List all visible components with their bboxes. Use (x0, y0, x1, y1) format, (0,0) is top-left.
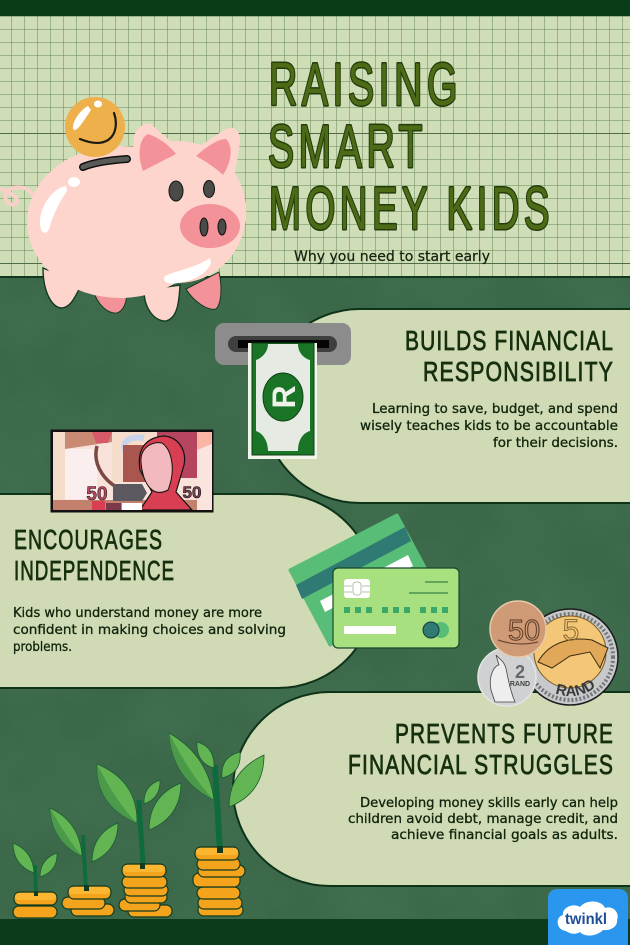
text: prevents future body: Developing money skills early can help (360, 796, 618, 811)
bottom band (0, 919, 630, 945)
icon: rand coins (477, 600, 619, 707)
title (268, 51, 554, 242)
heading: prevents future financial struggles (348, 718, 614, 780)
subtitle: Why you need to start early (294, 249, 490, 265)
eyes (169, 181, 183, 201)
snout (180, 204, 240, 248)
cloud (558, 901, 618, 936)
heading: builds financial responsibility (405, 325, 614, 387)
coin (65, 97, 125, 157)
highlights (40, 186, 67, 233)
icon: growing plants on coin stacks (13, 733, 264, 918)
text: builds financial responsibility body: for their decisions. (493, 436, 618, 451)
ears (134, 126, 182, 172)
graph paper header panel (0, 16, 630, 278)
text: builds financial responsibility body: wisely teaches kids to be accountable (360, 419, 618, 434)
panel: builds financial responsibility (263, 309, 630, 503)
title: SMART (268, 113, 427, 180)
heading: encourages independence: INDEPENDENCE (14, 555, 175, 586)
pig body (27, 146, 213, 298)
banknote (248, 343, 317, 459)
fifty cent coin: 50 (508, 615, 540, 647)
text: encourages independence body (13, 606, 286, 655)
logo: twinkl badge: twinkl (565, 911, 607, 928)
icon: cash slot with banknote: R (266, 385, 302, 409)
icon: piggy bank (0, 97, 246, 321)
icon: fifty rand banknote (52, 431, 212, 511)
heading: encourages independence (14, 524, 175, 586)
text: prevents future body: achieve financial goals as adults. (391, 828, 618, 843)
two rand coin: RAND (510, 681, 530, 688)
title: RAISING (269, 51, 462, 118)
slot housing (215, 323, 351, 365)
five rand coin (528, 608, 619, 706)
icon: credit cards (290, 515, 459, 648)
panel: encourages independence (0, 494, 375, 688)
front feet (43, 268, 82, 308)
text: builds financial responsibility body (360, 402, 618, 451)
top band (0, 0, 630, 16)
text: prevents future body (348, 796, 618, 843)
plant 3 (97, 764, 181, 917)
dark green background (0, 277, 630, 919)
plant 1 (13, 843, 57, 918)
pig tail (0, 187, 33, 205)
icon: fifty rand banknote: 50 (183, 483, 201, 502)
text: encourages independence body: problems. (13, 640, 72, 655)
banknote denomination: 50 (86, 484, 108, 505)
text: builds financial responsibility body: Learning to save, budget, and spend (372, 402, 618, 417)
two rand coin (478, 648, 536, 706)
two rand coin: 2 (515, 662, 525, 682)
text: encourages independence body: confident in making choices and solving (13, 623, 286, 638)
icon: cash slot with banknote (215, 323, 351, 459)
logo: twinkl badge (548, 889, 628, 945)
text: prevents future body: children avoid debt, manage credit, and (348, 812, 618, 827)
plant 4 (169, 733, 264, 916)
panel: prevents future financial struggles (233, 692, 630, 886)
five rand coin: 5 (563, 614, 579, 647)
back feet (92, 288, 127, 313)
text: encourages independence body: Kids who understand money are more (13, 606, 262, 621)
plant 2 (50, 808, 118, 916)
heading: encourages independence: ENCOURAGES (14, 524, 163, 555)
back card (290, 515, 437, 645)
front card (333, 568, 459, 648)
five rand coin: RAND (556, 680, 594, 696)
slot (83, 159, 127, 167)
